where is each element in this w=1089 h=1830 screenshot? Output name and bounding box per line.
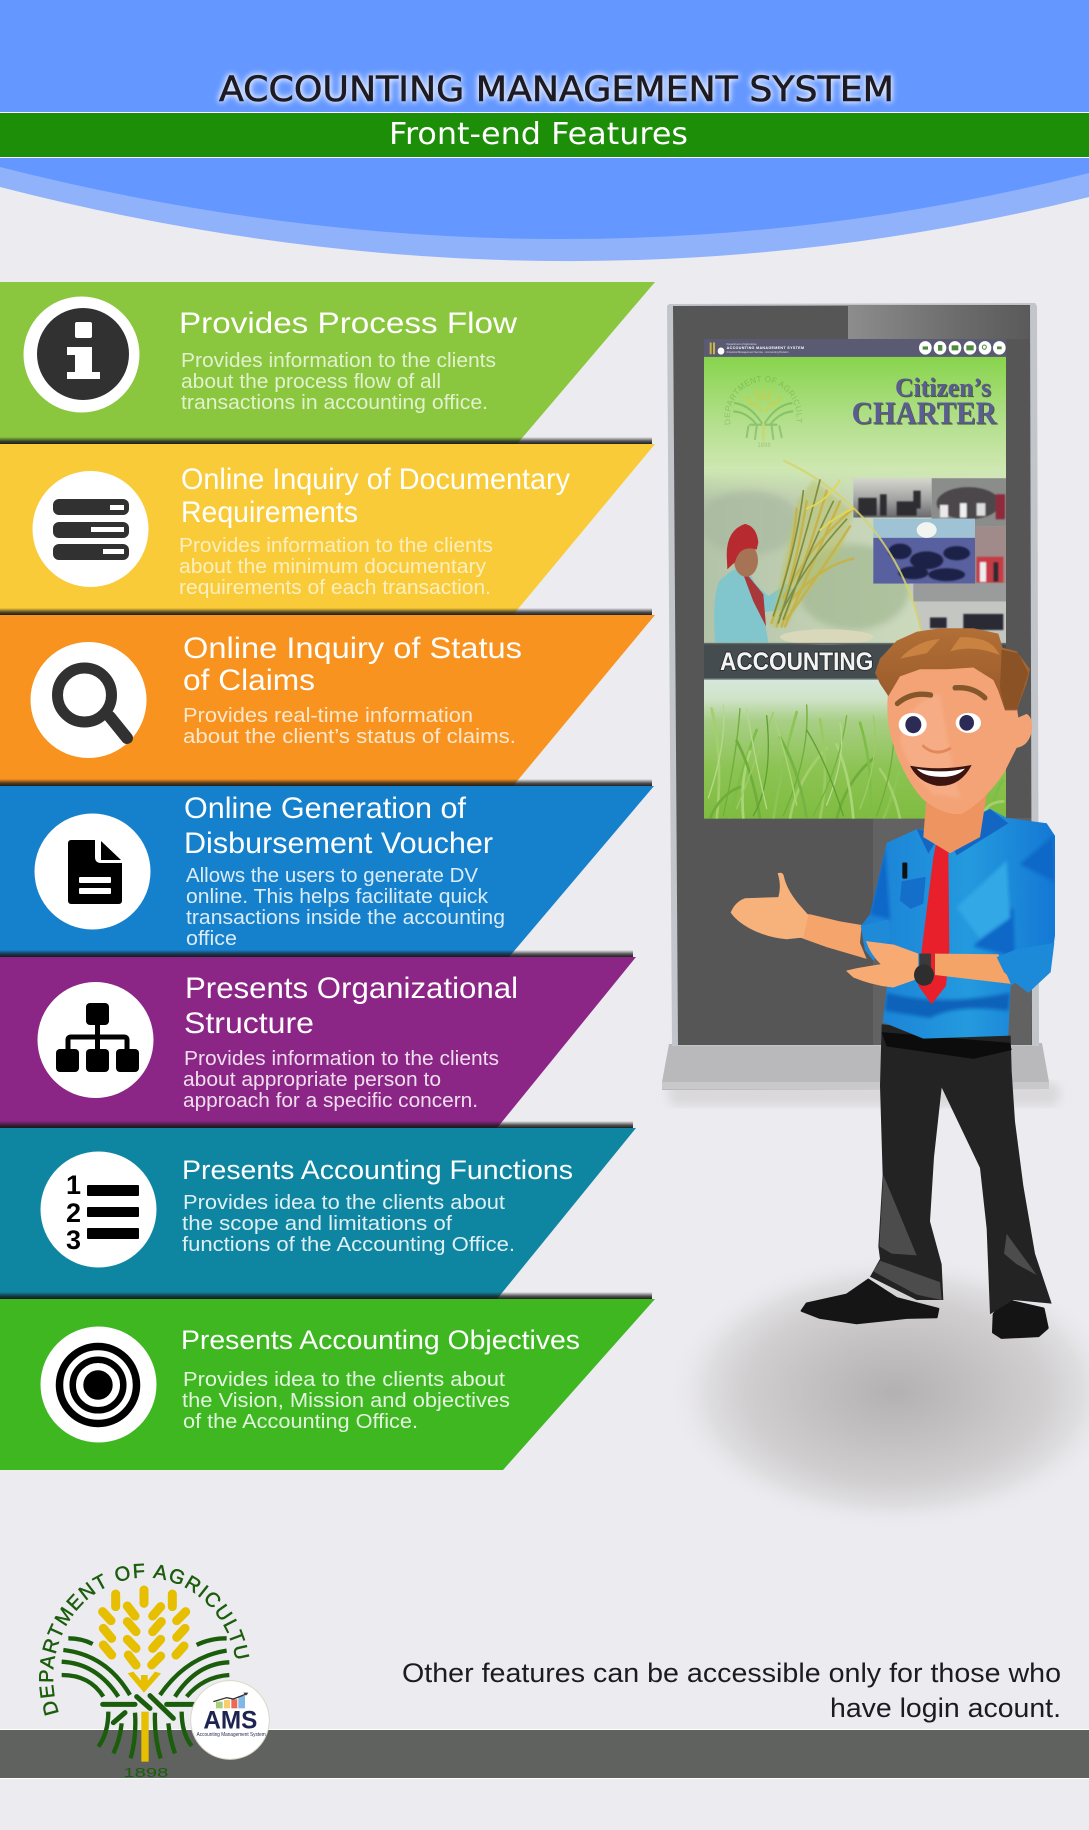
description	[182, 1369, 510, 1433]
department of agriculture logo	[39, 1564, 270, 1780]
screen top bar	[704, 339, 1006, 357]
heading	[184, 972, 518, 1040]
icon: information	[24, 296, 140, 412]
faint logo on screen: 1898	[757, 442, 771, 449]
icon: numbered list	[40, 1152, 156, 1268]
description	[182, 1192, 515, 1256]
footer note	[402, 1658, 1061, 1723]
crossing hand	[846, 941, 918, 987]
description	[186, 865, 505, 950]
heading: Presents Accounting Functions	[182, 1155, 573, 1185]
icon: org chart	[38, 982, 154, 1098]
subtitle: Front-end Features	[389, 117, 688, 152]
heading: Disbursement Voucher	[184, 827, 493, 860]
eyebrows	[897, 688, 985, 704]
icon: server list	[32, 471, 148, 587]
description: approach for a specific concern.	[183, 1090, 478, 1112]
kiosk frame	[667, 303, 1039, 1046]
faint logo on screen: DEPARTMENT OF AGRICULTURE	[724, 376, 802, 425]
description: Provides idea to the clients about	[183, 1192, 505, 1214]
heading	[183, 632, 522, 697]
description: transactions inside the accounting	[186, 907, 505, 929]
man head	[875, 628, 1032, 853]
heading: Online Inquiry of Documentary	[181, 463, 570, 496]
panel: disbursement voucher	[0, 786, 654, 957]
heading: Provides Process Flow	[179, 307, 517, 340]
heading: Presents Accounting Objectives	[181, 1325, 580, 1355]
description	[183, 1048, 499, 1112]
screen top bar: Financial Management Service - Accounting Division	[727, 350, 789, 354]
heading	[184, 792, 493, 860]
grass field	[704, 678, 1006, 819]
screen top bar: Department of Agriculture	[727, 342, 757, 346]
crossing forearm	[935, 954, 1011, 984]
footer note: have login acount.	[830, 1693, 1061, 1723]
heading: Requirements	[181, 496, 358, 529]
shirt	[862, 809, 1055, 1039]
left sleeve cuff	[861, 920, 891, 961]
founding year: 1898	[123, 1766, 168, 1780]
heading: Online Inquiry of Status	[183, 632, 522, 665]
footer note: Other features can be accessible only for those who	[402, 1658, 1061, 1688]
floor shadow	[667, 1254, 1089, 1530]
kiosk base shadow	[668, 1082, 1060, 1106]
heading: of Claims	[183, 664, 315, 697]
panel: documentary requirements	[0, 444, 655, 615]
trouser highlights	[873, 1175, 1037, 1300]
title: ACCOUNTING MANAGEMENT SYSTEM	[219, 70, 894, 110]
kiosk dark panel	[673, 305, 1032, 1045]
accounting banner on screen	[704, 643, 1006, 680]
screen top bar: ACCOUNTING MANAGEMENT SYSTEM	[727, 346, 804, 350]
description: Provides information to the clients	[181, 350, 496, 372]
description: office	[186, 928, 237, 950]
pocket and pen	[900, 877, 926, 909]
shirt collar	[917, 809, 1008, 855]
presenter character	[731, 628, 1055, 1337]
description: requirements of each transaction.	[179, 577, 491, 599]
face	[887, 659, 1032, 814]
green arcs and tie	[62, 1638, 229, 1758]
right shoe	[993, 1300, 1047, 1337]
description: about the minimum documentary	[179, 556, 486, 578]
man body	[731, 809, 1055, 1337]
header light curved band	[0, 160, 1089, 261]
kiosk display	[662, 303, 1060, 1106]
description: the scope and limitations of	[182, 1213, 452, 1235]
description: online. This helps facilitate quick	[186, 886, 489, 908]
description: Allows the users to generate DV	[186, 865, 479, 887]
panel: process flow	[0, 282, 655, 444]
description	[183, 705, 516, 748]
hair	[875, 628, 1030, 710]
heading: Presents Organizational	[185, 972, 518, 1005]
description: Provides idea to the clients about	[183, 1369, 505, 1391]
yellow stem	[141, 1712, 149, 1762]
wristwatch	[914, 954, 934, 986]
description: of the Accounting Office.	[183, 1411, 418, 1433]
trousers	[870, 1024, 1052, 1314]
charter heading: Citizen’s	[895, 372, 991, 402]
description: functions of the Accounting Office.	[182, 1234, 515, 1256]
icon: document	[34, 814, 150, 930]
logo arc text: DEPARTMENT OF AGRICULTU	[39, 1564, 250, 1716]
mouth	[910, 765, 972, 786]
left forearm	[798, 914, 867, 959]
green subtitle band	[0, 112, 1089, 158]
right sleeve cuff	[997, 943, 1054, 993]
header	[0, 0, 1089, 261]
icon: magnifier	[30, 642, 146, 758]
icon: numbered list: 3	[66, 1225, 81, 1255]
open hand	[731, 873, 808, 939]
icon: numbered list: 2	[66, 1198, 81, 1228]
rice bundle	[770, 480, 873, 645]
panel: accounting objectives	[0, 1299, 655, 1470]
description	[179, 535, 493, 599]
necktie	[918, 832, 950, 1004]
description	[181, 350, 496, 414]
panel: organizational structure	[0, 957, 636, 1128]
charter heading	[853, 378, 998, 426]
accounting banner on screen: ACCOUNTING	[720, 648, 873, 676]
AMS badge	[191, 1681, 269, 1759]
wheat grains	[103, 1590, 186, 1665]
nose	[923, 746, 950, 752]
neck	[923, 794, 987, 853]
misty rice field	[704, 469, 1006, 644]
description: about the client’s status of claims.	[183, 726, 516, 748]
AMS badge: AMS	[203, 1706, 257, 1734]
faint logo on screen	[724, 376, 802, 447]
icon: target	[40, 1326, 156, 1442]
left shoe	[802, 1280, 938, 1323]
woman harvesting rice	[714, 524, 797, 642]
description: transactions in accounting office.	[181, 392, 488, 414]
eyes	[899, 713, 981, 736]
panel: status of claims	[0, 615, 655, 786]
description: Provides information to the clients	[184, 1048, 499, 1070]
description: Provides real-time information	[183, 705, 473, 727]
heading: Online Generation of	[184, 792, 467, 825]
footer band	[0, 1729, 1089, 1779]
kiosk base	[662, 1043, 1049, 1090]
curved sweep edge	[783, 460, 922, 632]
charter heading: CHARTER	[852, 396, 998, 431]
panel: accounting functions	[0, 1128, 636, 1299]
heading	[181, 463, 570, 529]
description: about the process flow of all	[181, 371, 441, 393]
office photo collage	[853, 478, 1006, 644]
kiosk screen: citizen's charter	[704, 339, 1006, 819]
icon: numbered list: 1	[66, 1170, 81, 1200]
description: Provides information to the clients	[179, 535, 493, 557]
header blue curved band	[0, 0, 1089, 239]
description: about appropriate person to	[183, 1069, 441, 1091]
heading: Structure	[184, 1007, 314, 1040]
AMS badge: Accounting Management System	[197, 1732, 266, 1738]
description: the Vision, Mission and objectives	[182, 1390, 510, 1412]
